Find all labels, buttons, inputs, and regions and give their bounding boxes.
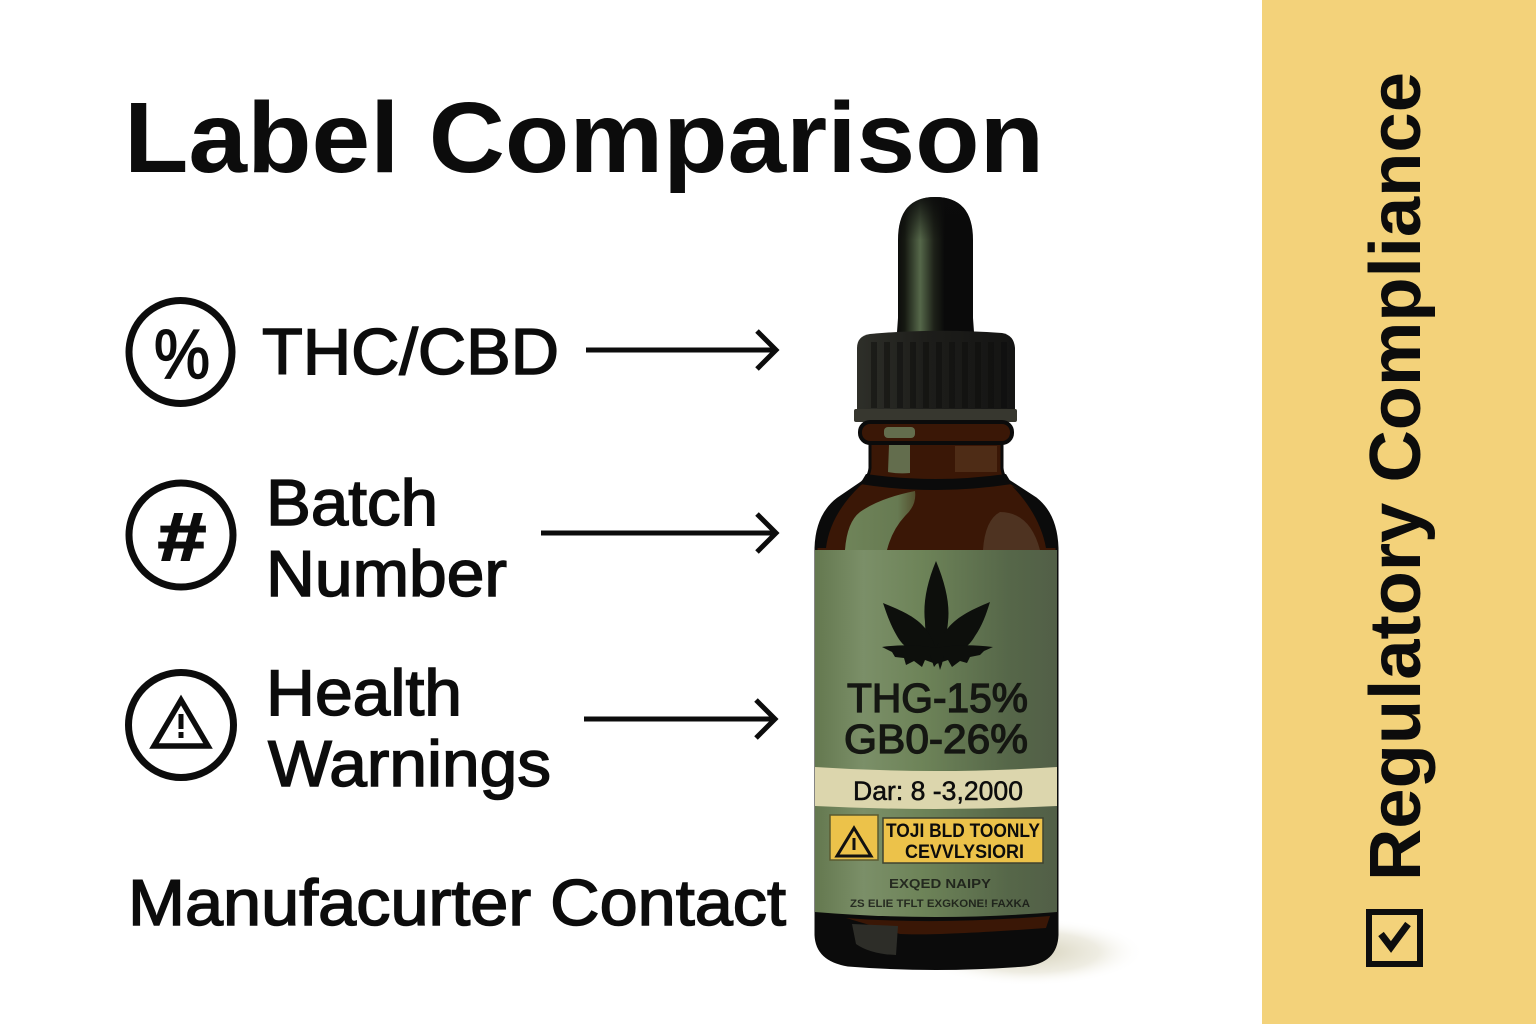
icon: percent: % [154, 315, 210, 393]
icon: hash [129, 483, 233, 587]
row: Batch Number [129, 466, 776, 610]
label: Health Warnings: Health [266, 656, 462, 729]
green label [815, 550, 1057, 917]
bottle body glass [816, 440, 1057, 968]
arrow: health warnings to bottle [584, 700, 775, 738]
potency text: THG-15% [847, 675, 1028, 721]
row: Health Warnings [128, 656, 775, 800]
neck reflection right [955, 446, 997, 472]
bottle base black [816, 912, 1057, 968]
warning box: text [883, 818, 1043, 863]
shoulder dark edge left [816, 486, 860, 548]
manufacturer small print: EXQED NAIPY [889, 876, 991, 891]
arrow: THC/CBD to bottle [586, 331, 776, 369]
warning box: text: TOJI BLD TOONLY [886, 821, 1040, 842]
label: Health Warnings: Warnings [268, 727, 551, 800]
potency text [844, 675, 1028, 762]
batch band [815, 767, 1057, 809]
potency text: GB0-26% [844, 716, 1028, 762]
manufacturer small print [850, 876, 1030, 910]
dropper bulb [897, 197, 974, 332]
bottle illustration [815, 197, 1057, 968]
neck ring highlight [884, 427, 915, 438]
sidebar heading: Regulatory Compliance [1356, 72, 1436, 881]
warning box: text: CEVVLYSIORI [905, 842, 1024, 863]
warning box: icon [830, 815, 878, 860]
icon: percent [129, 300, 232, 404]
label: Batch Number [266, 466, 507, 610]
row: THC/CBD [129, 300, 776, 404]
cap with ribs [857, 331, 1015, 410]
neck shadow band [860, 474, 1012, 490]
shoulder highlight [845, 491, 915, 550]
icon: hash: # [158, 499, 206, 575]
panel: regulatory compliance sidebar [1262, 0, 1536, 1024]
shoulder dark edge right [1012, 486, 1057, 548]
batch band text: Dar: 8 -3,2000 [853, 776, 1023, 806]
arrow: batch number to bottle [541, 514, 776, 552]
icon: cannabis leaf [882, 561, 993, 670]
cap flange [854, 409, 1017, 422]
bottle shadow [915, 918, 1145, 986]
icon: checkbox [1369, 912, 1420, 964]
label: manufacturer contact: Manufacurter Contact [128, 866, 786, 939]
manufacturer small print: ZS ELIE TFLT EXGKONE! FAXKA [850, 898, 1030, 910]
label: Batch Number: Batch [266, 466, 438, 539]
shoulder reflection right [983, 512, 1040, 550]
neck highlight [888, 445, 910, 473]
base amber strip [846, 916, 1050, 934]
icon: warning triangle [128, 672, 234, 778]
title: Label Comparison [124, 82, 1044, 194]
label: Batch Number: Number [266, 537, 507, 610]
label: Health Warnings [266, 656, 551, 800]
base glare [852, 924, 898, 955]
label: THC/CBD: THC/CBD [262, 315, 559, 388]
neck ring [860, 422, 1012, 443]
